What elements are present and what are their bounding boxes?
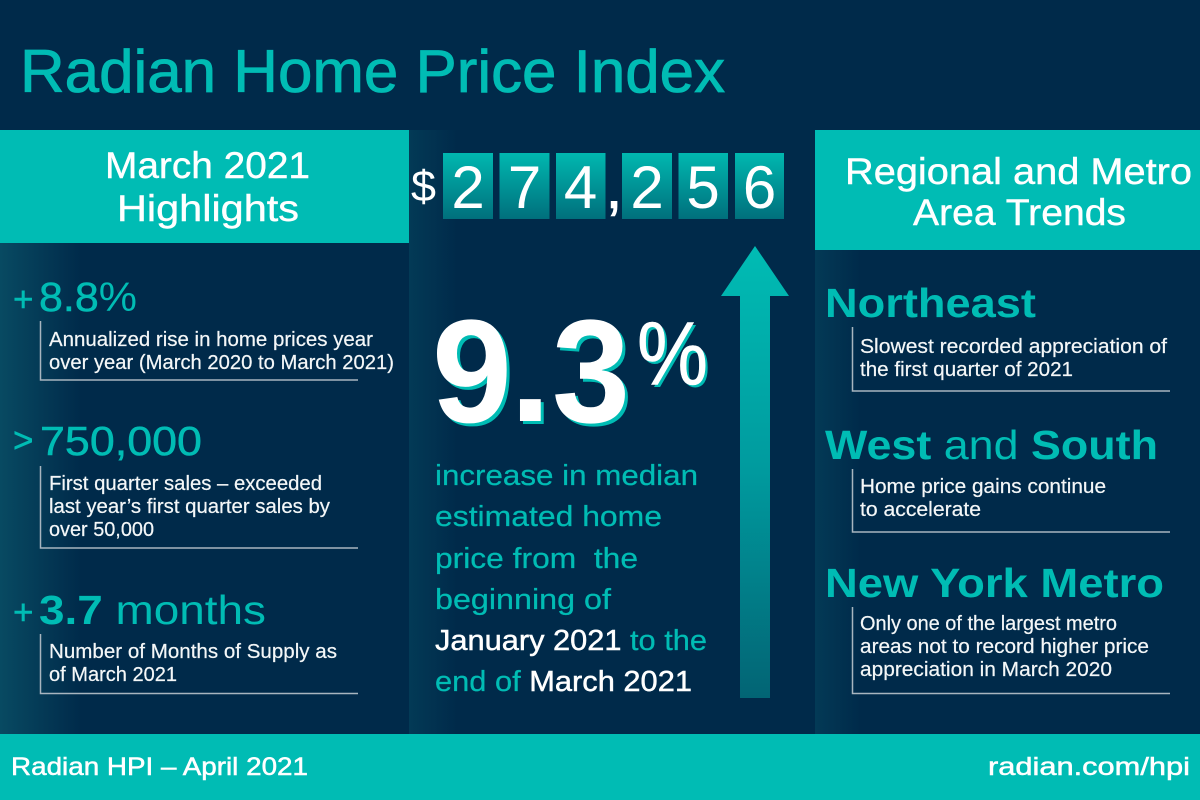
title: Radian Home Price Index xyxy=(20,38,725,105)
icon: up arrow xyxy=(721,246,789,698)
odometer price: 6 xyxy=(743,154,776,221)
increase description: increase in median xyxy=(435,460,698,492)
odometer price: , xyxy=(605,153,623,222)
stat: >750,000: 750,000 xyxy=(40,418,202,464)
increase description xyxy=(435,460,707,698)
big figure 9.3%: % xyxy=(640,307,710,407)
stat: +8.8%: 8.8% xyxy=(39,274,137,320)
stat: +8.8%: over year (March 2020 to March 2021) xyxy=(49,352,394,374)
stat: +8.8%: + xyxy=(13,280,33,319)
region: West and South: West and South xyxy=(825,422,1158,468)
panel: highlights header xyxy=(0,130,409,243)
panel: regional header xyxy=(815,130,1200,250)
stat: +3.7 months: + xyxy=(13,593,33,632)
big figure 9.3%: 9 xyxy=(432,290,512,454)
stat: +3.7 months xyxy=(13,587,358,694)
stat: +3.7 months: 3.7 months xyxy=(39,587,266,633)
big figure 9.3%: 3 xyxy=(552,290,630,454)
stat: >750,000: First quarter sales – exceeded xyxy=(49,473,322,495)
region: West and South: to accelerate xyxy=(860,499,981,521)
panel: regional header: Regional and Metro xyxy=(845,151,1192,192)
panel: highlights background xyxy=(0,243,409,734)
region: New York Metro: New York Metro xyxy=(825,560,1164,606)
stat: >750,000: > xyxy=(13,421,33,460)
panel: highlights header: March 2021 xyxy=(105,145,310,186)
region: New York Metro: appreciation in March 2020 xyxy=(860,659,1112,681)
region: West and South: Home price gains continue xyxy=(860,476,1106,498)
panel: centre background xyxy=(409,130,815,734)
odometer price: $ xyxy=(411,162,436,211)
region: Northeast: the first quarter of 2021 xyxy=(860,359,1073,381)
big figure 9.3%: 3 xyxy=(555,293,633,457)
increase description: price from the xyxy=(435,543,638,575)
stat: >750,000: over 50,000 xyxy=(49,519,154,541)
footer: Radian HPI – April 2021 xyxy=(11,753,308,781)
region: New York Metro: Only one of the largest metro xyxy=(860,613,1117,635)
stat: +8.8% xyxy=(13,274,394,380)
big figure 9.3%: 9 xyxy=(435,293,515,457)
big figure 9.3% xyxy=(432,289,710,457)
odometer price: 2 xyxy=(630,154,664,221)
panel: regional background xyxy=(815,250,1200,734)
increase description: January 2021 to the xyxy=(435,625,707,657)
stat: >750,000: last year’s first quarter sales by xyxy=(49,496,330,518)
stat: +3.7 months: Number of Months of Supply as xyxy=(49,641,337,663)
footer xyxy=(0,734,1200,800)
stat: +8.8%: Annualized rise in home prices year xyxy=(49,329,373,351)
region: New York Metro: areas not to record higher price xyxy=(860,636,1149,658)
footer: radian.com/hpi xyxy=(988,753,1190,781)
region: West and South xyxy=(825,422,1170,532)
stat: >750,000 xyxy=(13,418,358,548)
increase description: estimated home xyxy=(435,501,662,533)
big figure 9.3%: . xyxy=(510,289,551,453)
panel: regional header: Area Trends xyxy=(913,192,1126,233)
odometer price: 2 xyxy=(451,154,485,221)
region: Northeast xyxy=(825,280,1170,391)
big figure 9.3%: . xyxy=(513,292,554,456)
region: Northeast: Northeast xyxy=(825,280,1036,326)
odometer price xyxy=(411,153,784,222)
increase description: end of March 2021 xyxy=(435,666,692,698)
region: New York Metro xyxy=(825,560,1170,694)
panel: highlights header: Highlights xyxy=(117,188,299,229)
odometer price: 4 xyxy=(564,154,597,221)
odometer price: 7 xyxy=(508,154,541,221)
odometer price: 5 xyxy=(686,154,720,221)
big figure 9.3%: % xyxy=(637,304,708,404)
increase description: beginning of xyxy=(435,584,612,616)
region: Northeast: Slowest recorded appreciation of xyxy=(860,336,1167,358)
stat: +3.7 months: of March 2021 xyxy=(49,664,177,686)
